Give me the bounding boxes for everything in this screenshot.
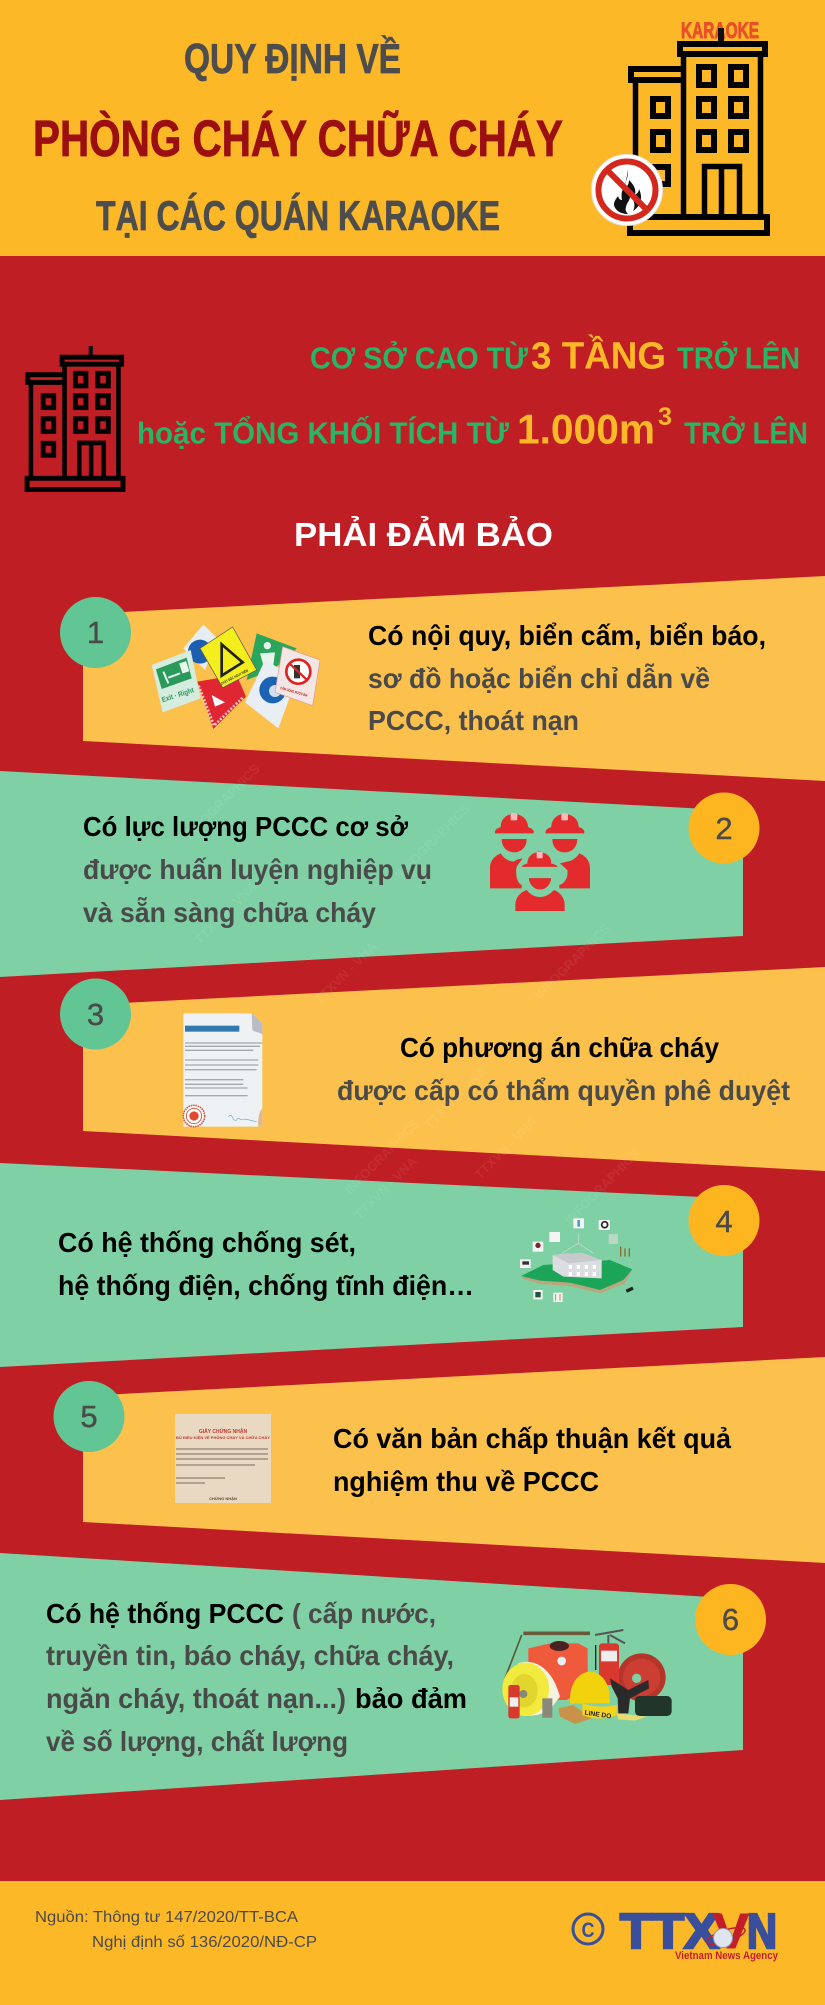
title line 2: PHÒNG CHÁY CHỮA CHÁY: [33, 109, 563, 167]
item 3 text: Có phương án chữa cháy: [400, 1032, 719, 1063]
copyright symbol: C: [582, 1919, 594, 1942]
number badge 5: [54, 1381, 124, 1452]
item 6 text: ngăn cháy, thoát nạn...): [46, 1683, 346, 1714]
item 6 text: Có hệ thống PCCC: [46, 1598, 284, 1629]
watermarks: TTXVN - VNA: [352, 1153, 420, 1222]
title line 1: QUY ĐỊNH VỀ: [184, 35, 401, 82]
header panel: [0, 0, 825, 256]
icon: fire fighting equipment: LINE DO: [584, 1710, 612, 1720]
item 1 text: [368, 620, 766, 736]
source text: Nghị định số 136/2020/NĐ-CP: [92, 1934, 317, 1951]
item 3 text: được cấp có thẩm quyền phê duyệt: [337, 1075, 790, 1106]
watermarks: [182, 761, 643, 1227]
condition line 2: TRỞ LÊN: [684, 414, 808, 450]
watermarks: TTXVN - VNA: [472, 1113, 540, 1182]
source text: [35, 1909, 317, 1951]
logo: TTXVN: TTX: [620, 1905, 719, 1959]
number badge 6: 6: [722, 1602, 739, 1637]
item 2 text: [83, 811, 432, 928]
number badge 5: 5: [80, 1399, 98, 1434]
panel: item 3: [60, 967, 825, 1171]
icon: acceptance certificate: CHỨNG NHẬN: [209, 1496, 237, 1501]
watermarks: TTXVN - VNA: [192, 878, 260, 947]
condition line 2: 1.000m: [517, 406, 655, 452]
item 5 text: [333, 1423, 731, 1497]
copyright symbol: [573, 1914, 603, 1944]
item 1 text: Có nội quy, biển cấm, biển báo,: [368, 620, 766, 651]
icon: lightning protection diagram: [520, 1218, 634, 1302]
condition line 1: 3 TẦNG: [531, 334, 666, 378]
source text: Nguồn: Thông tư 147/2020/TT-BCA: [35, 1909, 298, 1926]
item 5 text: nghiệm thu về PCCC: [333, 1466, 599, 1497]
item 6 text: ( cấp nước,: [292, 1598, 436, 1629]
footer panel: [0, 1881, 825, 2005]
icon: acceptance certificate: GIẤY CHỨNG NHẬN: [199, 1428, 247, 1435]
icon: safety signs: CHẤT ĐỘC NGUY HIỂM: [220, 668, 249, 686]
logo: TTXVN: N: [747, 1905, 777, 1959]
item 1 text: sơ đồ hoặc biển chỉ dẫn về: [368, 663, 710, 694]
watermarks: INFOGRAPHICS: [532, 921, 613, 1002]
panel: item 4: [0, 1163, 760, 1367]
number badge 4: [688, 1185, 760, 1256]
number badge 6: [695, 1584, 766, 1655]
condition line 1: CƠ SỞ CAO TỪ: [310, 340, 529, 376]
watermarks: INFOGRAPHICS: [182, 761, 263, 842]
item 4 text: Có hệ thống chống sét,: [58, 1227, 356, 1258]
watermarks: INFOGRAPHICS: [562, 1146, 643, 1227]
panel: item 5: [54, 1357, 825, 1563]
icon: karaoke building: [630, 18, 767, 233]
title line 3: TẠI CÁC QUÁN KARAOKE: [96, 192, 500, 239]
item 4 text: [58, 1227, 474, 1301]
item 2 text: được huấn luyện nghiệp vụ: [83, 854, 432, 885]
item 5 text: Có văn bản chấp thuận kết quả: [333, 1423, 731, 1454]
panel: item 1: [60, 576, 825, 781]
watermarks: INFOGRAPHICS: [392, 801, 473, 882]
condition line 1: TRỞ LÊN: [677, 340, 800, 376]
icon: acceptance certificate: ĐỦ ĐIỀU KIỆN VỀ PHÒNG CHÁY VÀ CHỮA CHÁY: [176, 1435, 270, 1440]
item 2 text: Có lực lượng PCCC cơ sở: [83, 811, 408, 842]
panel: item 2: [0, 771, 760, 977]
logo: TTXVN: [620, 1905, 779, 1962]
icon: no fire sign: [592, 154, 662, 226]
icon: safety signs: Exit · Right: [161, 685, 195, 704]
item 6 text: về số lượng, chất lượng: [46, 1726, 348, 1757]
logo: TTXVN: V: [713, 1905, 749, 1959]
number badge 3: 3: [87, 997, 104, 1032]
item 6 text: truyền tin, báo cháy, chữa cháy,: [46, 1640, 454, 1671]
number badge 2: 2: [715, 811, 733, 846]
condition line 2: hoặc TỔNG KHỐI TÍCH TỪ: [137, 414, 510, 450]
number badge 4: 4: [715, 1204, 733, 1239]
icon: safety signs: [152, 624, 320, 729]
icon: safety signs: CẤM UỐNG RƯỢU BIA: [280, 685, 309, 698]
heading: must ensure: PHẢI ĐẢM BẢO: [294, 516, 553, 553]
icon: certified document: [183, 1013, 262, 1127]
number badge 3: [60, 978, 131, 1050]
item 3 text: [337, 1032, 790, 1106]
icon: acceptance certificate: [175, 1414, 271, 1503]
number badge 1: 1: [87, 615, 104, 650]
icon: fire fighting equipment: [502, 1630, 672, 1724]
icon: firefighters: [490, 813, 590, 911]
watermarks: TTXVN - VNA: [422, 1063, 490, 1132]
watermarks: INFOGRAPHICS: [342, 1116, 423, 1197]
item 6 text: bảo đảm: [355, 1683, 467, 1714]
icon: red section building: [27, 346, 123, 490]
watermarks: TTXVN - VNA: [312, 938, 380, 1007]
item 6 text: [46, 1598, 467, 1757]
item 1 text: PCCC, thoát nạn: [368, 705, 579, 736]
logo: TTXVN: Vietnam News Agency: [675, 1950, 779, 1962]
condition line 2: 3: [658, 403, 672, 431]
number badge 1: [60, 597, 131, 668]
condition line 1: [310, 334, 800, 378]
icon: karaoke building: KARAOKE: [681, 18, 759, 43]
item 4 text: hệ thống điện, chống tĩnh điện…: [58, 1270, 474, 1301]
item 2 text: và sẵn sàng chữa cháy: [83, 896, 376, 928]
panel: item 6: [0, 1553, 766, 1800]
number badge 2: [688, 792, 760, 864]
condition line 2: [137, 403, 808, 452]
